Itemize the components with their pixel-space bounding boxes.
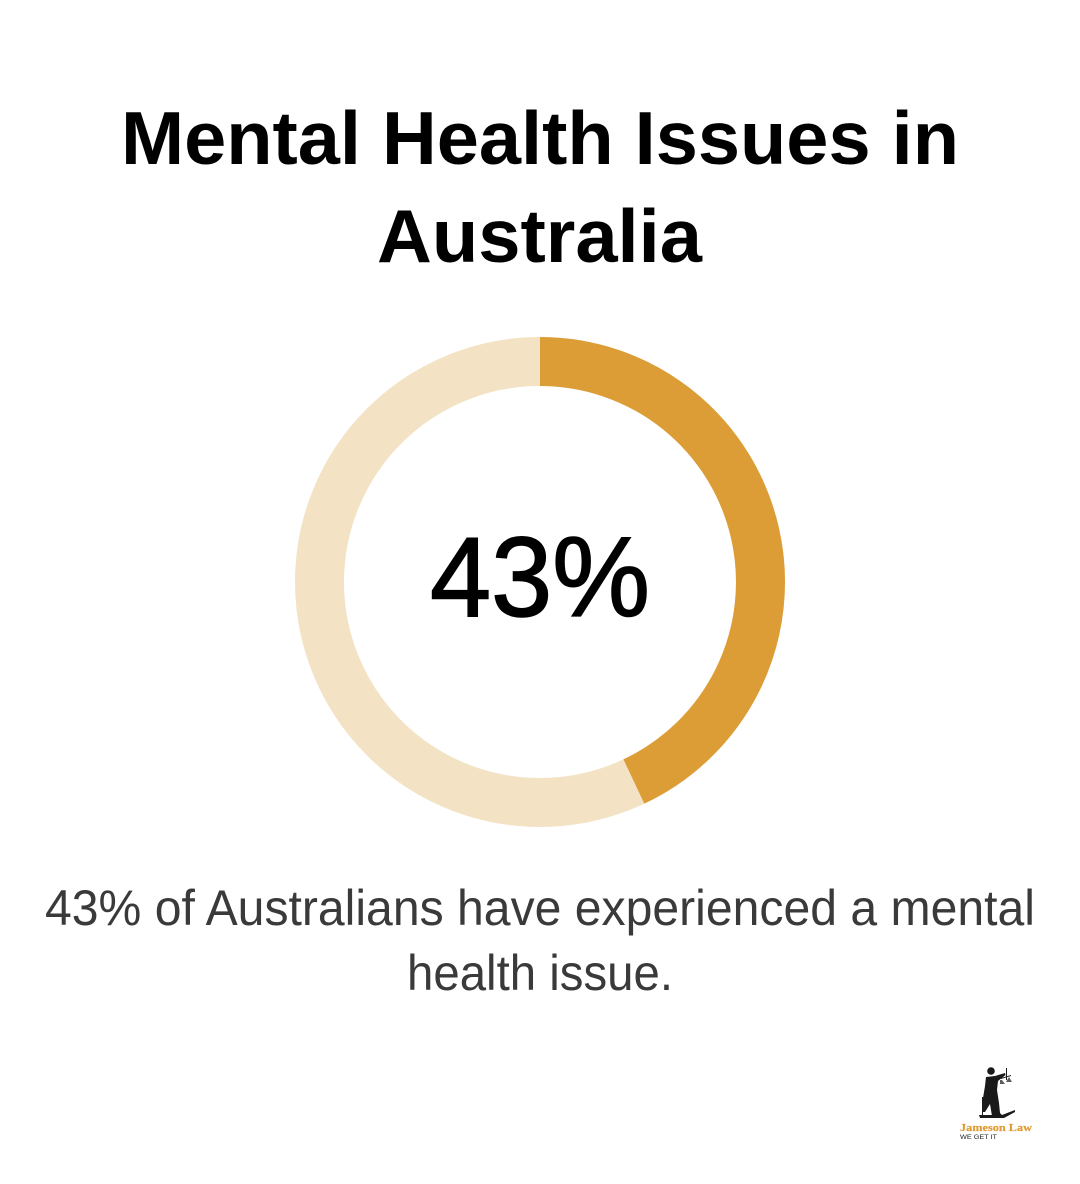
donut track	[320, 362, 760, 802]
description text: health issue.	[407, 945, 673, 1001]
donut centre value: 43%	[430, 514, 650, 640]
donut value arc	[540, 362, 760, 782]
logo: Jameson Law	[960, 1067, 1032, 1141]
donut chart: 43%	[320, 362, 760, 802]
description text: 43% of Australians have experienced a mental	[45, 880, 1035, 936]
logo wordmark: Jameson Law	[960, 1123, 1032, 1134]
title	[121, 96, 959, 278]
title: Mental Health Issues in	[121, 96, 959, 180]
logo tagline: WE GET IT	[960, 1134, 997, 1141]
description text	[45, 880, 1035, 1001]
icon: lady justice	[979, 1067, 1015, 1118]
title: Australia	[377, 194, 703, 278]
